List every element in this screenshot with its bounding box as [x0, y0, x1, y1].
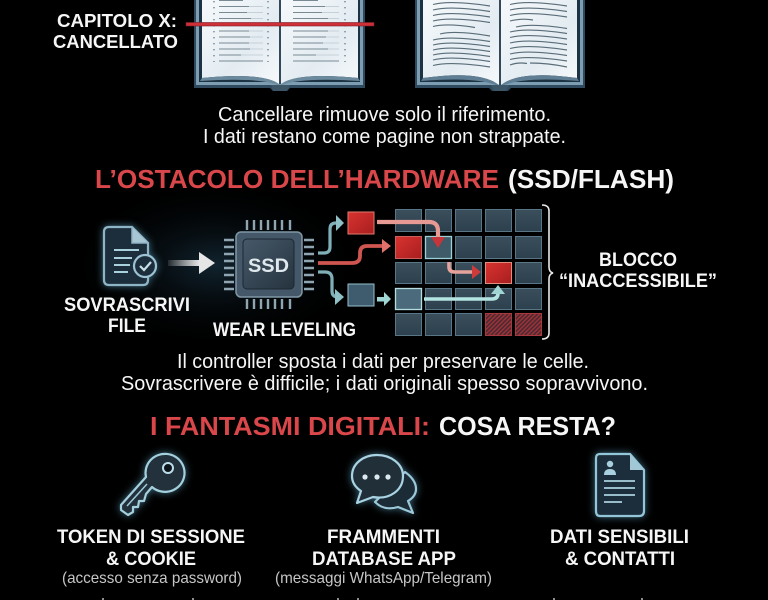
heading: hardware obstacle: (SSD/FLASH) — [508, 164, 674, 194]
label: sensitive data: & CONTATTI — [565, 549, 675, 570]
label: sensitive data — [550, 527, 689, 570]
label: session tokens: & COOKIE — [106, 549, 196, 570]
label: app database fragments: DATABASE APP — [312, 549, 456, 570]
bracket — [542, 205, 553, 339]
label: wear leveling: WEAR LEVELING — [213, 320, 356, 341]
text: controller explanation: Il controller sposta i dati per preservare le celle. — [177, 351, 589, 373]
label: sovrascrivi file: SOVRASCRIVI — [64, 295, 190, 316]
label: sovrascrivi file: FILE — [108, 316, 146, 337]
arrow: file to SSD — [168, 252, 215, 274]
label: inaccessible block: “INACCESSIBILE” — [559, 271, 717, 292]
arrow: cell to red cell — [449, 262, 481, 279]
source blue block — [348, 284, 374, 306]
arrow: SSD to blue block — [318, 272, 344, 305]
text: caption about deletion: I dati restano come pagine non strappate. — [203, 126, 566, 148]
label: app database fragments — [275, 527, 492, 587]
label: session tokens — [57, 527, 245, 587]
label: sensitive data: DATI SENSIBILI — [550, 527, 689, 548]
label: sovrascrivi file — [64, 295, 190, 337]
arrow: SSD to red grid cell — [318, 239, 391, 263]
icon: chat bubbles — [352, 455, 416, 513]
red strike-through line — [186, 22, 374, 26]
text: caption about deletion — [203, 104, 566, 148]
icon: document with contact — [596, 454, 644, 516]
icon: open book with erased chapter — [194, 0, 365, 91]
text: controller explanation — [121, 351, 648, 395]
arrow: SSD to red block — [318, 215, 344, 253]
label: capitolo cancellato: CANCELLATO — [53, 31, 178, 52]
note: messages: (messaggi WhatsApp/Telegram) — [275, 570, 492, 587]
arrow: blue cell to grid — [424, 285, 505, 299]
source red block — [348, 212, 374, 234]
label: capitolo cancellato — [53, 10, 178, 52]
clipped text line at bottom edge — [103, 598, 642, 600]
heading: hardware obstacle: L’OSTACOLO DELL’HARDWARE — [95, 164, 499, 194]
icon: SSD chip — [224, 220, 314, 309]
text: controller explanation: Sovrascrivere è difficile; i dati originali spesso sopravvivono. — [121, 373, 648, 395]
label: capitolo cancellato: CAPITOLO X: — [57, 10, 177, 31]
label: inaccessible block: BLOCCO — [599, 250, 677, 271]
SSD label: SSD — [248, 256, 289, 277]
icon: open book intact — [415, 0, 585, 91]
heading: digital ghosts: I FANTASMI DIGITALI: — [150, 411, 430, 441]
label: inaccessible block — [559, 250, 717, 292]
label: session tokens: TOKEN DI SESSIONE — [57, 527, 245, 548]
block grid — [396, 210, 542, 336]
note: passwordless access: (accesso senza password) — [62, 570, 242, 587]
label: app database fragments: FRAMMENTI — [327, 527, 440, 548]
heading: digital ghosts: COSA RESTA? — [439, 411, 616, 441]
icon: overwrite file — [104, 227, 156, 285]
arrow: red block to highlighted cell — [377, 222, 445, 248]
icon: key — [121, 454, 185, 515]
arrow: blue block to grid — [377, 292, 391, 306]
heading: hardware obstacle — [95, 164, 674, 194]
text: caption about deletion: Cancellare rimuove solo il riferimento. — [218, 104, 551, 126]
heading: digital ghosts — [150, 411, 616, 441]
